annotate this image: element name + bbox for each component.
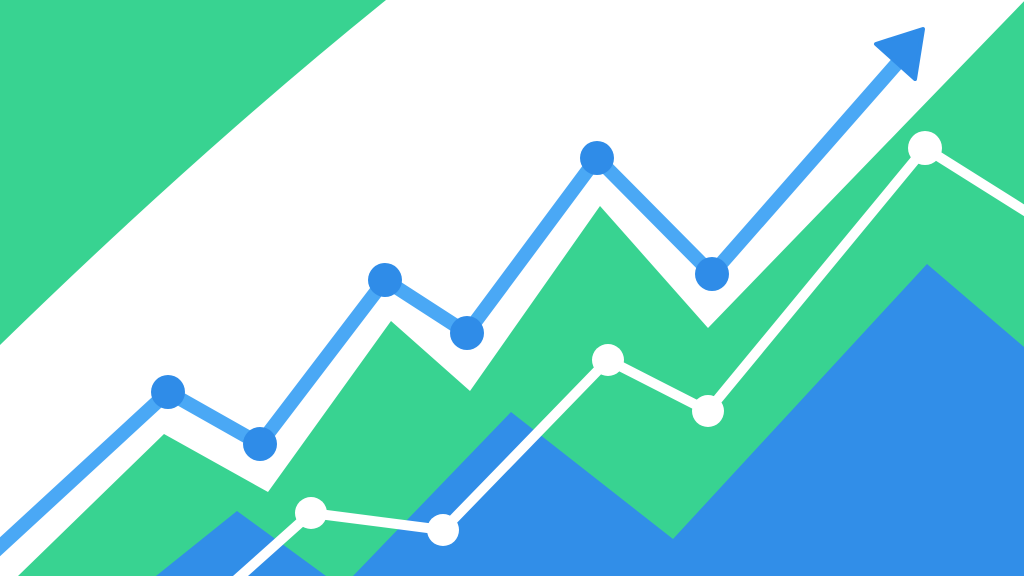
blue mountain area bbox=[156, 264, 1024, 576]
white trend line bbox=[236, 131, 1024, 576]
top-left green corner bbox=[0, 0, 386, 345]
